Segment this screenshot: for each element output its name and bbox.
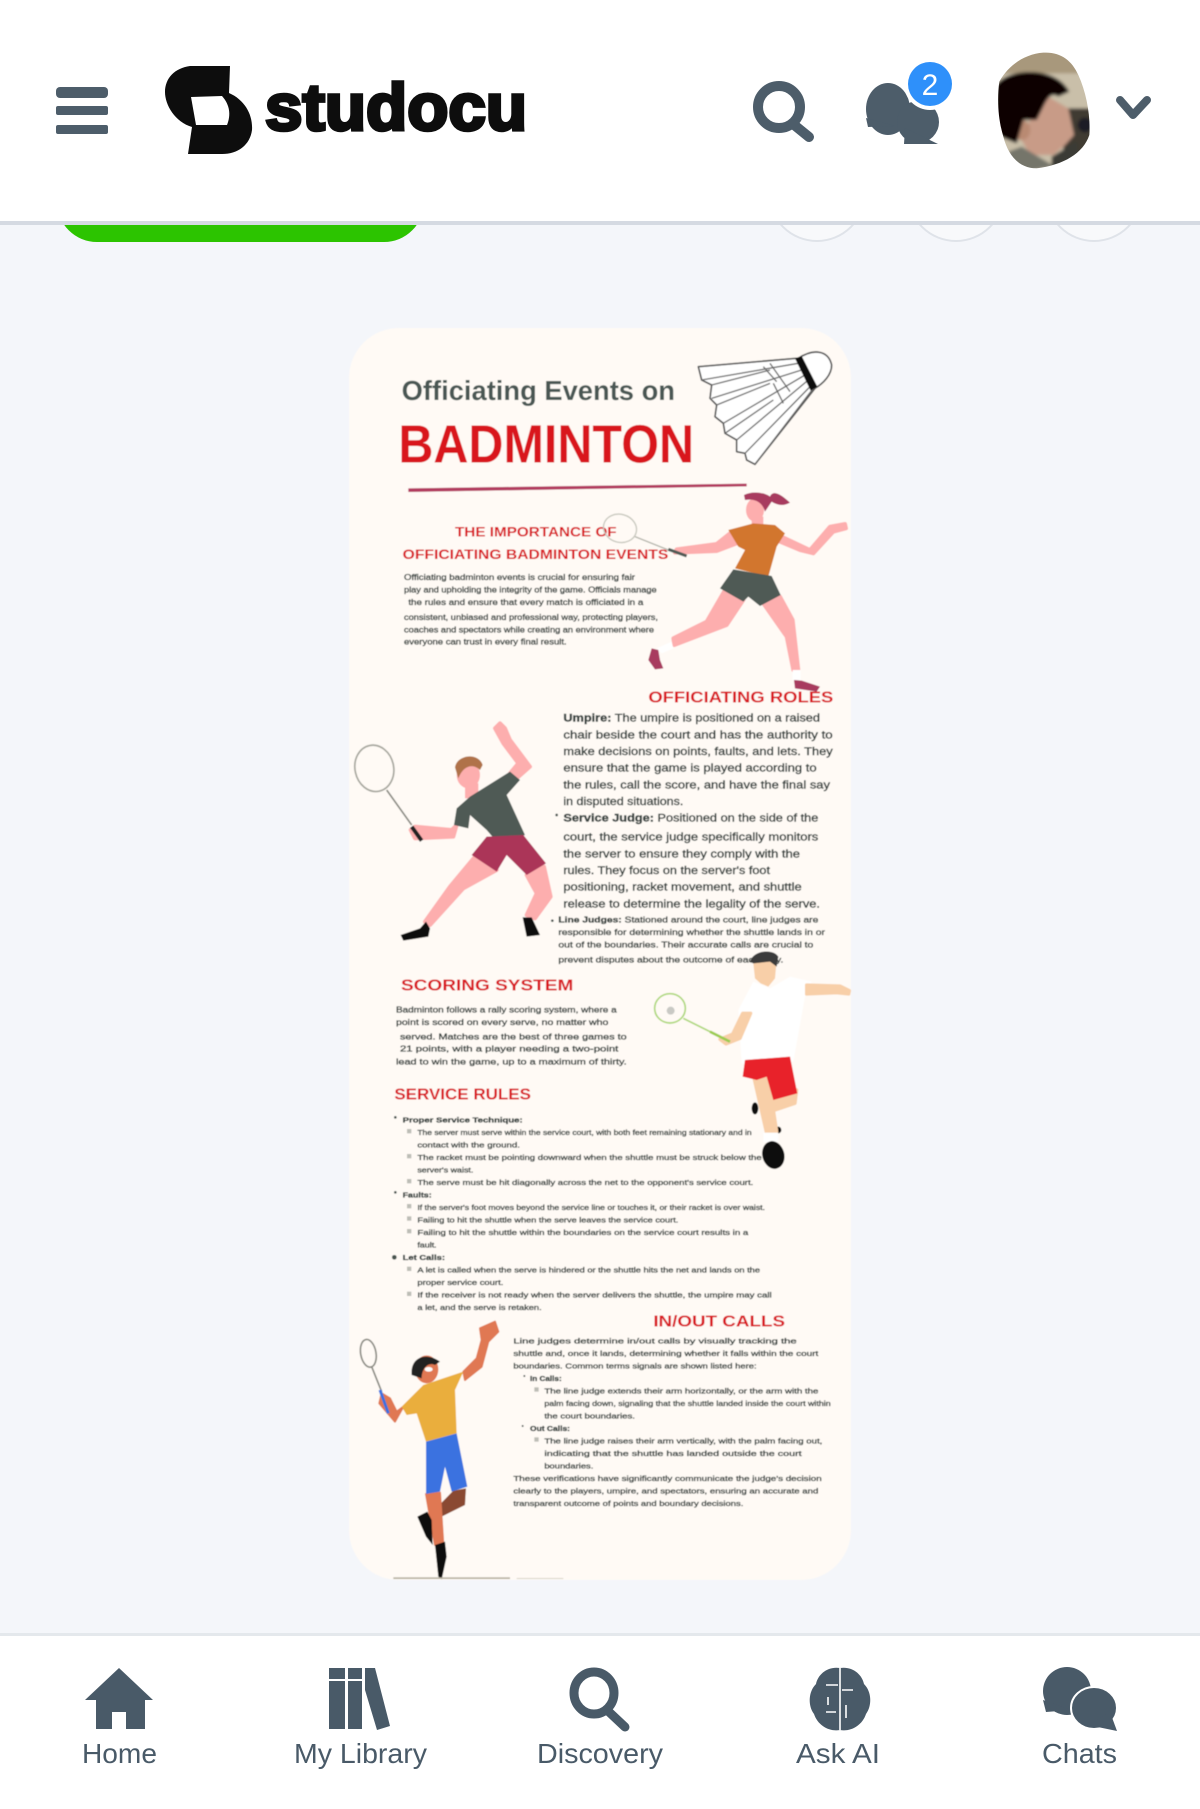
intro paragraph [404, 572, 658, 646]
in/out paragraph: the court boundaries. [544, 1411, 635, 1420]
in/out paragraph: In Calls: [530, 1374, 562, 1383]
heading: service rules: SERVICE RULES [394, 1086, 531, 1103]
notification badge: 2 [922, 69, 938, 102]
heading: the importance of officiating: THE IMPORTANCE OF [455, 524, 617, 540]
text: line judges: prevent disputes about the outcome of each rally. [558, 954, 783, 964]
text: service judge: release to determine the legality of the serve. [563, 898, 820, 910]
icon: hamburger menu [56, 87, 108, 134]
service rules list: Let Calls: [403, 1253, 445, 1262]
scoring paragraph: point is scored on every serve, no matter who [396, 1017, 609, 1027]
service rules list: Proper Service Technique: [403, 1116, 523, 1125]
bottom navigation bar [0, 1633, 1200, 1809]
text: service judge: court, the service judge specifically monitors [563, 832, 819, 844]
heading: in/out calls: IN/OUT CALLS [653, 1314, 785, 1331]
heading: scoring system: SCORING SYSTEM [401, 978, 573, 995]
scoring paragraph: lead to win the game, up to a maximum of thirty. [396, 1056, 627, 1066]
section: title and intro [398, 352, 846, 692]
service rules list: A let is called when the serve is hindered or the shuttle hits the net and lands on the [417, 1266, 760, 1275]
text: line judges: Line Judges: Stationed around the court, line judges are [558, 914, 819, 924]
text: umpire: in disputed situations. [563, 796, 683, 808]
service rules list: Faults: [403, 1190, 432, 1199]
in/out paragraph: Out Calls: [530, 1424, 570, 1433]
nav item: ask ai: Ask AI [796, 1738, 880, 1769]
service rules list: fault. [417, 1241, 437, 1250]
in/out paragraph: indicating that the shuttle has landed outside the court [544, 1449, 803, 1458]
intro paragraph: Officiating badminton events is crucial for ensuring fair [404, 572, 635, 582]
icon: chats with badge [866, 58, 956, 144]
icon: search [758, 86, 809, 137]
list bullets [522, 1375, 539, 1442]
service rules list: The serve must be hit diagonally across the net to the opponent's service court. [417, 1178, 753, 1187]
nav item: home: Home [82, 1738, 157, 1769]
text: service judge: Service Judge: Positioned on the side of the [563, 813, 818, 825]
in/out paragraph [513, 1336, 831, 1508]
intro paragraph: play and upholding the integrity of the game. Officials manage [404, 585, 657, 595]
section: in/out calls [358, 1322, 831, 1579]
service rules list: If the server's foot moves beyond the service line or touches it, or their racket is over waist. [417, 1203, 765, 1212]
service rules list: If the receiver is not ready when the server delivers the shuttle, the umpire may call [417, 1291, 772, 1300]
top header bar [0, 0, 1200, 225]
service rules list: Failing to hit the shuttle within the boundaries on the service court results in a [417, 1228, 749, 1237]
in/out paragraph: The line judge raises their arm vertically, with the palm facing out, [544, 1436, 822, 1445]
service rules list: contact with the ground. [417, 1141, 520, 1150]
heading: officiating roles: OFFICIATING ROLES [648, 690, 833, 707]
text: line judges [558, 914, 825, 964]
text: service judge: rules. They focus on the server's foot [563, 865, 770, 877]
text: service judge: positioning, racket movement, and shuttle [563, 882, 802, 894]
service rules list: The racket must be pointing downward when the shuttle must be struck below the [417, 1153, 762, 1162]
scoring paragraph: 21 points, with a player needing a two-point [400, 1044, 619, 1054]
text: umpire: the rules, call the score, and have the final say [563, 779, 831, 791]
in/out paragraph: palm facing down, signaling that the shuttle landed inside the court within [544, 1399, 831, 1408]
illustration: male player with racket [351, 723, 551, 941]
text: umpire [563, 713, 833, 808]
green download button [57, 150, 424, 242]
service rules list: The server must serve within the service court, with both feet remaining stationary and in [417, 1128, 752, 1137]
logo mark [165, 66, 252, 154]
in/out paragraph: Line judges determine in/out calls by visually tracking the [513, 1336, 797, 1345]
scoring paragraph: Badminton follows a rally scoring system, where a [396, 1004, 617, 1014]
in/out paragraph: boundaries. Common terms signals are shown listed here: [513, 1361, 757, 1370]
nav item: my library [294, 1668, 427, 1769]
nav item: discovery: Discovery [537, 1738, 663, 1769]
nav item: chats [1042, 1667, 1117, 1769]
nav item: ask ai [796, 1668, 880, 1769]
subtitle: Officiating Events on [402, 375, 675, 406]
logo wordmark: studocu [265, 70, 527, 144]
heading: the importance of officiating: OFFICIATING BADMINTON EVENTS [403, 546, 668, 562]
scoring paragraph: served. Matches are the best of three games to [400, 1031, 627, 1041]
underline stroke [408, 484, 747, 492]
nav item: discovery [537, 1672, 663, 1769]
in/out paragraph: shuttle and, once it lands, determining whether it falls within the court [513, 1349, 819, 1358]
section: officiating roles and scoring [351, 690, 849, 1171]
in/out paragraph: clearly to the players, umpire, and spectators, ensuring an accurate and [513, 1486, 818, 1495]
nav item: chats: Chats [1042, 1738, 1117, 1769]
text: line judges: responsible for determining whether the shuttle lands in or [558, 927, 825, 937]
nav item: home [82, 1668, 157, 1769]
in/out paragraph: transparent outcome of points and boundary decisions. [513, 1499, 743, 1508]
nav item: my library: My Library [294, 1738, 427, 1769]
round action buttons [769, 145, 1142, 241]
service rules list: server's waist. [417, 1166, 473, 1175]
scoring paragraph [396, 1004, 627, 1066]
section: service rules [392, 1086, 785, 1331]
text: service judge: the server to ensure they comply with the [563, 848, 800, 860]
icon: shuttlecock [698, 352, 832, 464]
intro paragraph: everyone can trust in every final result. [404, 636, 567, 646]
text: umpire: Umpire: The umpire is positioned on a raised [563, 713, 820, 725]
in/out paragraph: These verifications have significantly communicate the judge's decision [513, 1474, 822, 1483]
list bullets [392, 1116, 411, 1296]
icon: chevron [1120, 100, 1147, 115]
intro paragraph: consistent, unbiased and professional way, protecting players, [404, 612, 658, 622]
text: umpire: make decisions on points, faults, and lets. They [563, 746, 833, 758]
service rules list: proper service court. [417, 1278, 503, 1287]
panel: infographic document [349, 328, 851, 1580]
service rules list: a let, and the serve is retaken. [417, 1303, 542, 1312]
illustration: player in white and red [655, 951, 849, 1171]
text: line judges: out of the boundaries. Their accurate calls are crucial to [558, 939, 814, 949]
partially hidden toolbar behind header [57, 145, 1142, 242]
heading: the importance of officiating [403, 524, 668, 562]
intro paragraph: the rules and ensure that every match is officiated in a [408, 597, 644, 607]
service rules list: Failing to hit the shuttle when the serve leaves the service court. [417, 1215, 678, 1224]
intro paragraph: coaches and spectators while creating an environment where [404, 624, 654, 634]
service rules list [403, 1116, 772, 1312]
in/out paragraph: The line judge extends their arm horizontally, or the arm with the [544, 1386, 818, 1395]
user avatar [998, 52, 1090, 168]
in/out paragraph: boundaries. [544, 1461, 593, 1470]
text: umpire: ensure that the game is played according to [563, 763, 817, 775]
text: service judge [563, 813, 820, 910]
text: umpire: chair beside the court and has the authority to [563, 729, 833, 741]
bullets [551, 814, 558, 922]
title: BADMINTON [398, 416, 694, 475]
illustration: woman player [600, 492, 846, 692]
illustration: jumping player [358, 1322, 563, 1579]
